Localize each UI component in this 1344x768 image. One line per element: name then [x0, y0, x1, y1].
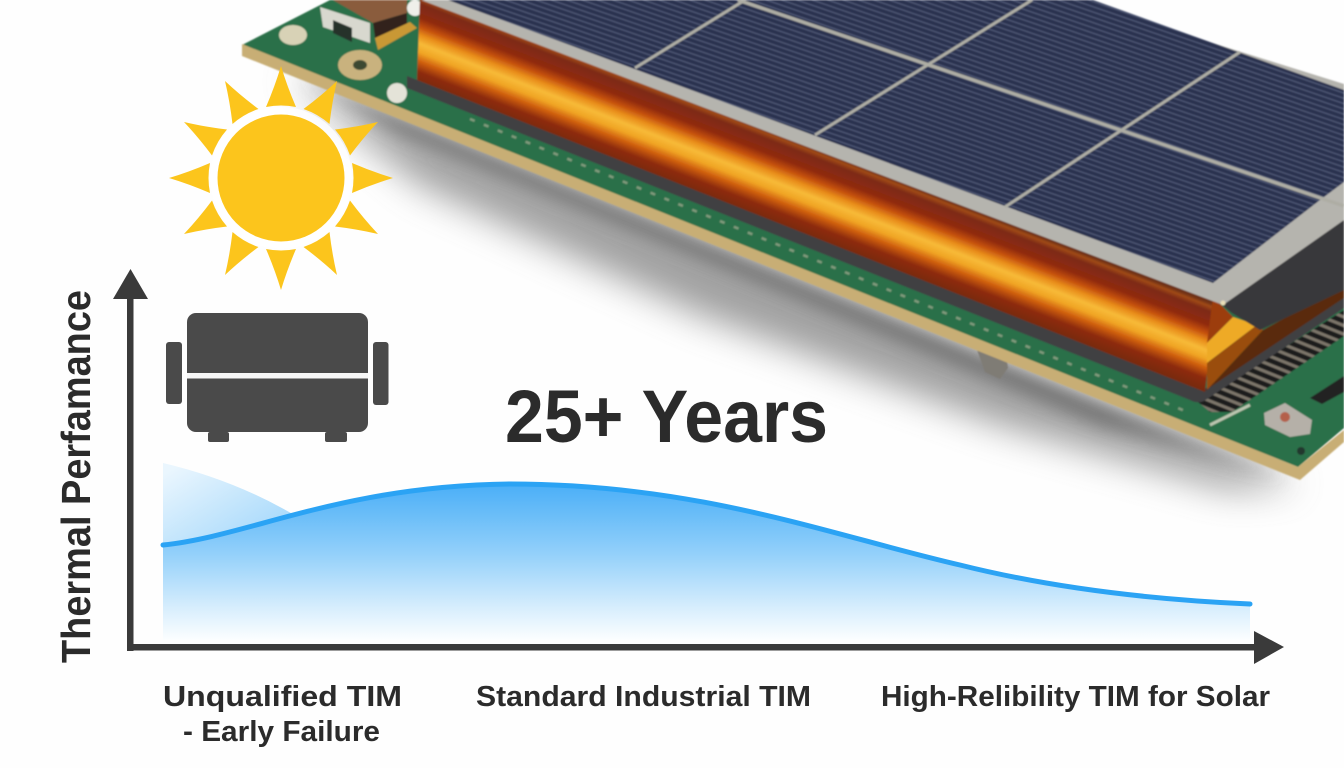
- label: unqualified TIM: [163, 681, 402, 748]
- icon: sofa-shaped module: [166, 313, 388, 442]
- label: unqualified TIM: - Early Failure: [183, 716, 380, 748]
- cell grid lines: [635, 0, 1344, 207]
- y axis arrow: [113, 269, 148, 651]
- chip pins: [1198, 310, 1344, 412]
- label: unqualified TIM: Unqualified TIM: [163, 681, 402, 713]
- solar panel: [421, 0, 1344, 330]
- metal pin under board: [977, 350, 1008, 379]
- device shadow: [285, 75, 1300, 490]
- label: standard industrial TIM: Standard Industrial TIM: [476, 681, 811, 713]
- area chart: [163, 463, 1250, 640]
- performance curve: [163, 484, 1250, 604]
- label: high-reliability TIM: High-Relibility TIM for Solar: [881, 681, 1270, 713]
- sun rays: [169, 66, 393, 290]
- sun icon: [169, 66, 393, 290]
- solar module on circuit board: [242, 0, 1344, 480]
- board components: [279, 0, 1344, 455]
- area under curve: [163, 484, 1250, 640]
- x axis arrow: [127, 631, 1284, 664]
- circuit board: [242, 0, 1344, 480]
- thermal interface layer: [417, 0, 1344, 392]
- sun ring: [214, 111, 348, 245]
- chip base: [407, 76, 1344, 402]
- headline: 25+ Years: 25+ Years: [505, 375, 828, 458]
- faded early-failure wedge: [163, 463, 296, 546]
- y axis label: Thermal Perfamance: [53, 290, 99, 663]
- sun disc: [218, 114, 344, 242]
